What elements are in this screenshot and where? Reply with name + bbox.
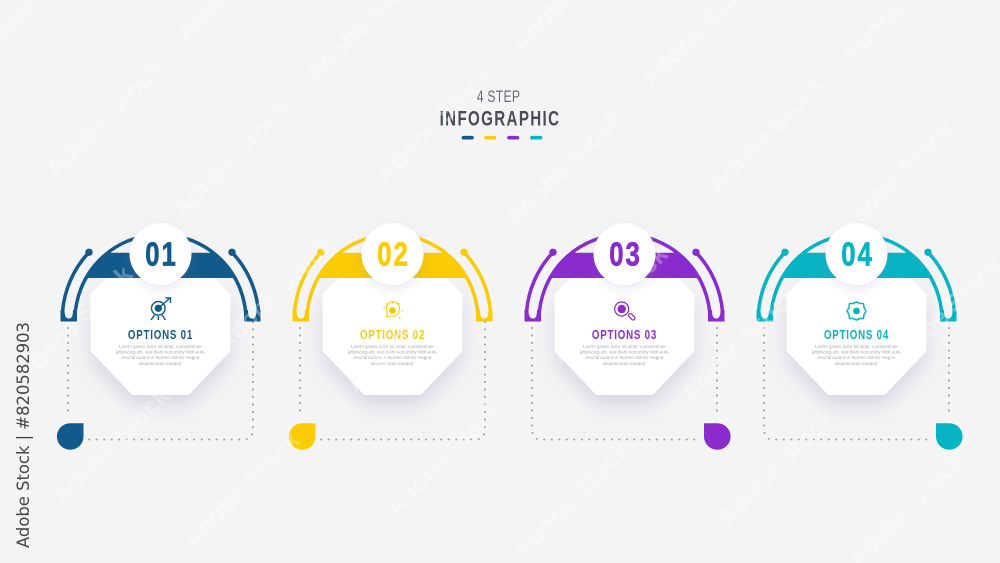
stock watermark pattern: Adobe Stock — [507, 436, 635, 563]
body text 04: adipiscing elit, sed diam nonummy nibh euis- — [812, 350, 902, 354]
panel: step 04 — [756, 223, 963, 450]
body text 03: aliquam erat volutpat. — [602, 361, 646, 366]
drop marker 03 — [704, 423, 731, 450]
arch 01 — [60, 234, 260, 322]
number badge 04 — [826, 223, 888, 285]
icon: target 01 — [151, 298, 170, 320]
number badge 03 — [594, 223, 656, 285]
heading 02: OPTIONS 02 — [360, 329, 425, 342]
icon: magnifier 03 — [615, 302, 636, 321]
stock watermark pattern: Adobe Stock — [380, 394, 508, 522]
body text 01: Lorem ipsum dolor sit amet, consectetuer — [119, 344, 202, 349]
body text 01 — [116, 344, 206, 366]
stock watermark pattern: Adobe Stock — [10, 260, 138, 388]
body text 01: aliquam erat volutpat. — [138, 361, 182, 366]
body text 02: mod tincidunt ut laoreet dolore magna — [354, 355, 432, 360]
dotted connector 01 — [68, 322, 253, 440]
stock id side label: Adobe Stock | #820582903 — [14, 322, 34, 548]
stock watermark pattern: Adobe Stock — [47, 382, 175, 510]
body text 02: adipiscing elit, sed diam nonummy nibh euis- — [348, 350, 438, 354]
number badge 02: 02 — [377, 237, 410, 273]
drop marker 02 — [289, 423, 316, 450]
body text 04: Lorem ipsum dolor sit amet, consectetuer — [815, 344, 898, 349]
dotted connector 02 — [300, 322, 485, 440]
body text 04 — [812, 344, 902, 366]
octagon card 04 — [792, 283, 922, 390]
panel: step 01 — [57, 223, 261, 450]
arch 04 — [756, 234, 956, 322]
octagon card 02 — [328, 283, 458, 390]
number badge 03: 03 — [609, 237, 642, 273]
body text 02: Lorem ipsum dolor sit amet, consectetuer — [351, 344, 434, 349]
heading 01: OPTIONS 01 — [128, 329, 193, 342]
icon: sun speech bubble 02 — [384, 301, 404, 318]
octagon card 03 — [560, 283, 690, 390]
octagon card 01 — [96, 283, 226, 390]
body text 01: mod tincidunt ut laoreet dolore magna — [122, 355, 200, 360]
stock watermark pattern: Adobe Stock — [340, 270, 468, 398]
number badge 01 — [130, 223, 192, 285]
icon: gear 04 — [847, 302, 866, 320]
dotted connector 04 — [764, 328, 949, 440]
number badge 04: 04 — [841, 237, 874, 273]
heading 04: OPTIONS 04 — [824, 329, 889, 342]
stock watermark pattern: Adobe Stock — [545, 240, 673, 368]
body text 03: Lorem ipsum dolor sit amet, consectetuer — [583, 344, 666, 349]
dotted connector 03 — [532, 328, 717, 440]
stock watermark pattern: Adobe Stock — [832, 114, 960, 242]
stock watermark pattern: Adobe Stock — [702, 70, 830, 198]
drop marker 01 — [57, 423, 84, 450]
panel: step 03 — [524, 223, 731, 450]
title colour dashes — [464, 136, 540, 139]
body text 01: adipiscing elit, sed diam nonummy nibh euis- — [116, 350, 206, 354]
body text 02: aliquam erat volutpat. — [370, 361, 414, 366]
body text 02 — [348, 344, 438, 366]
drop marker 04 — [936, 423, 963, 450]
number badge 01: 01 — [145, 237, 178, 273]
body text 03: adipiscing elit, sed diam nonummy nibh euis- — [580, 350, 670, 354]
title: INFOGRAPHIC — [440, 106, 560, 130]
body text 04: aliquam erat volutpat. — [834, 361, 878, 366]
stock watermark pattern: Adobe Stock — [370, 60, 498, 188]
stock watermark pattern: Adobe Stock — [177, 426, 305, 554]
stock watermark pattern: Adobe Stock — [40, 55, 168, 183]
stock watermark pattern: Adobe Stock — [675, 280, 803, 408]
arch 02 — [292, 234, 492, 322]
title — [440, 88, 560, 130]
body text 03: mod tincidunt ut laoreet dolore magna — [586, 355, 664, 360]
panel: step 02 — [289, 223, 492, 450]
stock watermark pattern: Adobe Stock — [167, 95, 295, 223]
heading 03: OPTIONS 03 — [592, 329, 657, 342]
body text 04: mod tincidunt ut laoreet dolore magna — [818, 355, 896, 360]
stock watermark pattern: Adobe Stock — [500, 104, 628, 232]
stock watermark pattern: Adobe Stock — [712, 404, 840, 532]
number badge 02 — [362, 223, 424, 285]
body text 03 — [580, 344, 670, 366]
arch 03 — [524, 234, 724, 322]
title: 4 STEP — [477, 88, 520, 107]
stock watermark pattern: Adobe Stock — [210, 230, 338, 358]
